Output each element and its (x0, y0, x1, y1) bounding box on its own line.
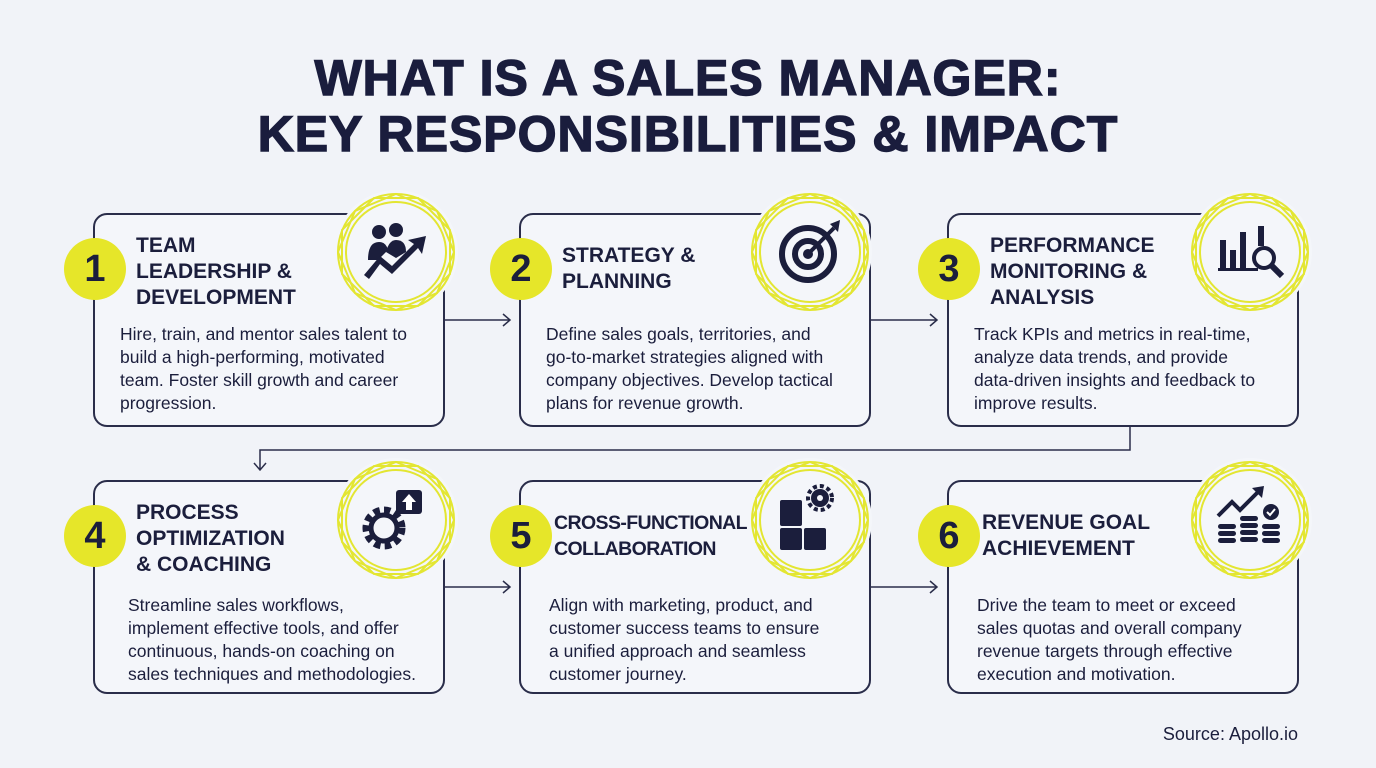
icon ring 1: team growth (334, 190, 458, 314)
body 4: continuous, hands-on coaching on (128, 641, 395, 661)
heading 3: MONITORING & (990, 260, 1147, 283)
card 3 (947, 213, 1299, 427)
badge 3: 3 (938, 248, 960, 290)
badge 1: 1 (84, 248, 106, 290)
icon ring 4: gear upload (334, 458, 458, 582)
badge 6 (918, 505, 980, 567)
heading 1 (136, 234, 296, 309)
badge 1 (64, 238, 126, 300)
body 4: sales techniques and methodologies. (128, 664, 416, 684)
body 4 (128, 595, 416, 684)
icon ring 5: puzzle gear (748, 458, 872, 582)
heading 2 (562, 244, 695, 293)
badge 6: 6 (938, 515, 960, 557)
body 5: customer journey. (549, 664, 687, 684)
heading 1: TEAM (136, 234, 196, 257)
heading 5: CROSS-FUNCTIONAL (554, 512, 747, 534)
body 1: build a high-performing, motivated (120, 347, 385, 367)
body 6: revenue targets through effective (977, 641, 1233, 661)
body 5: customer success teams to ensure (549, 618, 819, 638)
body 1: Hire, train, and mentor sales talent to (120, 324, 407, 344)
card 1 (93, 213, 445, 427)
card 4 (93, 480, 445, 694)
source: Source: Apollo.io (1163, 724, 1298, 744)
badge 5: 5 (510, 515, 532, 557)
heading 5 (554, 512, 747, 560)
heading 6 (982, 511, 1150, 560)
badge 3 (918, 238, 980, 300)
badge 5 (490, 505, 552, 567)
card 5 (519, 480, 871, 694)
body 1: progression. (120, 393, 216, 413)
card 5 frame (519, 480, 871, 694)
heading 6: ACHIEVEMENT (982, 537, 1135, 560)
heading 4 (136, 501, 285, 576)
icon ring 3: chart magnifier (1188, 190, 1312, 314)
body 3: Track KPIs and metrics in real-time, (974, 324, 1251, 344)
body 5 (549, 595, 819, 684)
heading 5: COLLABORATION (554, 538, 716, 560)
heading 2: STRATEGY & (562, 244, 695, 267)
heading 1: DEVELOPMENT (136, 286, 296, 309)
body 1 (120, 324, 407, 413)
body 5: a unified approach and seamless (549, 641, 806, 661)
card 6 (947, 480, 1299, 694)
heading 4: PROCESS (136, 501, 239, 524)
title: KEY RESPONSIBILITIES & IMPACT (258, 106, 1118, 162)
body 6: Drive the team to meet or exceed (977, 595, 1236, 615)
body 2: Define sales goals, territories, and (546, 324, 811, 344)
title (258, 50, 1118, 162)
body 6: sales quotas and overall company (977, 618, 1242, 638)
heading 4: OPTIMIZATION (136, 527, 285, 550)
body 4: implement effective tools, and offer (128, 618, 399, 638)
badge 2: 2 (510, 248, 532, 290)
heading 3 (990, 234, 1155, 309)
body 1: team. Foster skill growth and career (120, 370, 398, 390)
badge 4 (64, 505, 126, 567)
icon ring 6: coins growth (1188, 458, 1312, 582)
heading 6: REVENUE GOAL (982, 511, 1150, 534)
body 4: Streamline sales workflows, (128, 595, 344, 615)
heading 3: ANALYSIS (990, 286, 1094, 309)
body 3 (974, 324, 1255, 413)
body 2: company objectives. Develop tactical (546, 370, 833, 390)
heading 1: LEADERSHIP & (136, 260, 292, 283)
title: WHAT IS A SALES MANAGER: (314, 50, 1062, 106)
body 2: go-to-market strategies aligned with (546, 347, 823, 367)
body 3: improve results. (974, 393, 1098, 413)
body 6 (977, 595, 1242, 684)
heading 4: & COACHING (136, 553, 271, 576)
body 2 (546, 324, 833, 413)
heading 2: PLANNING (562, 270, 672, 293)
body 6: execution and motivation. (977, 664, 1175, 684)
badge 4: 4 (84, 515, 106, 557)
body 2: plans for revenue growth. (546, 393, 743, 413)
body 5: Align with marketing, product, and (549, 595, 813, 615)
icon ring 2: target (748, 190, 872, 314)
badge 2 (490, 238, 552, 300)
card 2 (519, 213, 871, 427)
heading 3: PERFORMANCE (990, 234, 1155, 257)
body 3: data-driven insights and feedback to (974, 370, 1255, 390)
body 3: analyze data trends, and provide (974, 347, 1228, 367)
